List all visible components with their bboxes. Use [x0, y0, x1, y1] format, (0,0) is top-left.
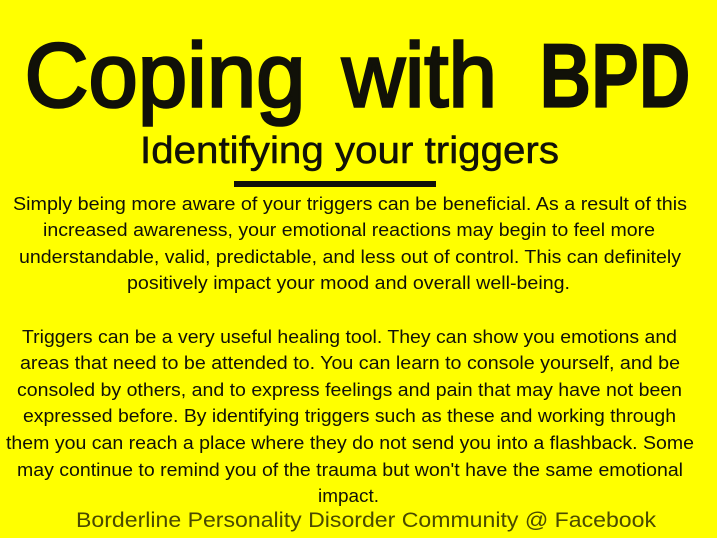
paragraph 2: areas that need to be attended to. You can learn to console yourself, and be	[20, 353, 680, 373]
divider bar	[234, 181, 436, 187]
paragraph 2: impact.	[318, 486, 379, 506]
paragraph 1: increased awareness, your emotional reactions may begin to feel more	[43, 220, 655, 240]
paragraph 2: expressed before. By identifying triggers such as these and working through	[23, 406, 676, 426]
paragraph 1	[13, 194, 687, 293]
paragraph 2	[6, 327, 694, 506]
paragraph 2: Triggers can be a very useful healing tool. They can show you emotions and	[22, 327, 677, 347]
paragraph 1: positively impact your mood and overall well-being.	[127, 273, 570, 293]
paragraph 1: understandable, valid, predictable, and less out of control. This can definitely	[19, 247, 681, 267]
paragraph 1: Simply being more aware of your triggers can be beneficial. As a result of this	[13, 194, 687, 214]
paragraph 2: may continue to remind you of the trauma but won't have the same emotional	[17, 460, 683, 480]
title: with	[341, 26, 497, 126]
footer credit: Borderline Personality Disorder Community @ Facebook	[76, 509, 657, 532]
title	[24, 26, 690, 127]
subtitle: Identifying your triggers	[140, 130, 559, 172]
paragraph 2: consoled by others, and to express feelings and pain that may have not been	[17, 380, 682, 400]
title: Coping	[24, 26, 306, 126]
paragraph 2: them you can reach a place where they do not send you into a flashback. Some	[6, 433, 694, 453]
